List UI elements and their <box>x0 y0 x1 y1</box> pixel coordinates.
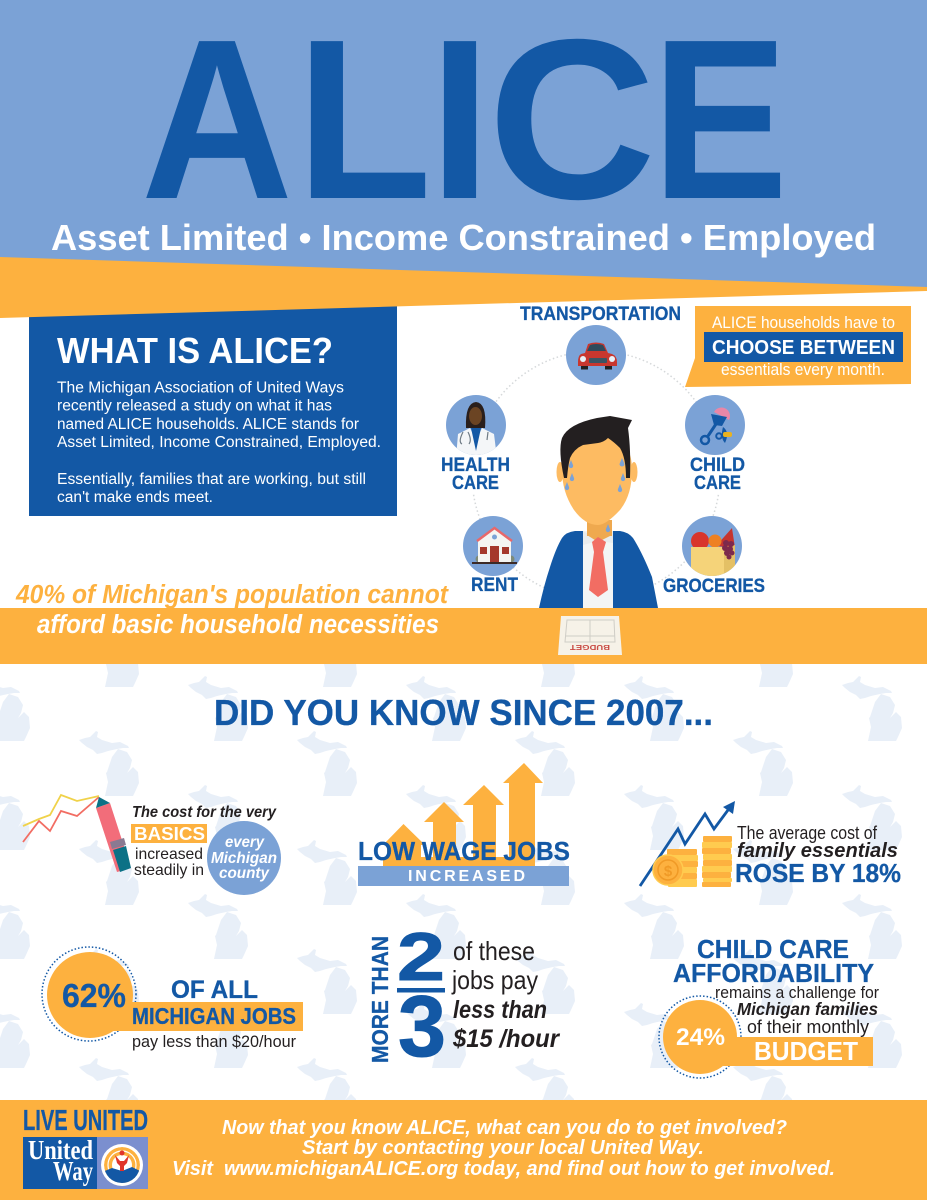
icon: budget paper <box>558 616 622 655</box>
text block: definition: named ALICE households. ALICE stands for <box>57 416 359 433</box>
callout: 40 percent statement <box>15 581 449 639</box>
panel: child care affordability: AFFORDABILITY <box>673 960 874 988</box>
logo: Live United: LIVE UNITED <box>23 1105 148 1137</box>
panel: child care affordability: remains a challenge for <box>715 984 879 1002</box>
icon: groceries bag <box>682 516 742 577</box>
title: ALICE: A <box>141 0 293 247</box>
label: health care: HEALTH <box>441 455 510 476</box>
label: child care: CHILD <box>690 455 745 476</box>
panel: family essentials: family essentials <box>737 839 898 862</box>
panel: cost of basics: Michigan <box>211 850 277 867</box>
panel: 62 percent of jobs: 62% <box>62 977 126 1014</box>
orange diagonal band <box>0 257 927 318</box>
panel: two thirds of jobs: less than <box>453 996 547 1024</box>
callout: choose between: ALICE households have to <box>712 314 895 332</box>
title: ALICE: E <box>652 0 788 247</box>
panel: child care affordability: Michigan families <box>737 999 878 1019</box>
text block: call to action: Start by contacting your local United Way. <box>302 1137 704 1159</box>
icon: pencil chart <box>23 795 131 872</box>
panel: what is ALICE <box>29 300 397 516</box>
panel: cost of basics: every <box>225 834 265 851</box>
label: transportation: TRANSPORTATION <box>520 304 681 325</box>
text block: call to action: Now that you know ALICE, what can you do to get involved? <box>222 1117 787 1139</box>
panel: cost of basics: county <box>219 865 270 882</box>
label: child care: CARE <box>694 473 741 494</box>
panel: cost of basics <box>23 795 281 895</box>
text block: definition: can't make ends meet. <box>57 489 213 506</box>
panel: child care affordability: of their monthly <box>747 1017 869 1037</box>
text block: definition: recently released a study on what it has <box>57 398 332 414</box>
text block: definition: Essentially, families that are working, but still <box>57 471 366 488</box>
panel: low wage jobs <box>358 763 570 886</box>
panel: low wage jobs: LOW WAGE JOBS <box>358 838 570 866</box>
callout: choose between: CHOOSE BETWEEN <box>712 337 895 359</box>
callout: choose between <box>685 306 911 387</box>
orange statement band <box>0 608 927 664</box>
title: ALICE: C <box>488 0 656 247</box>
heading: what is ALICE: WHAT IS ALICE? <box>57 330 333 371</box>
icon: rent house <box>463 516 523 576</box>
panel: two thirds of jobs: $15 /hour <box>452 1025 560 1053</box>
panel: two thirds of jobs: 3 <box>398 979 446 1075</box>
panel: cost of basics: The cost for the very <box>132 804 277 821</box>
panel: family essentials: The average cost of <box>737 823 878 843</box>
subtitle: Asset Limited • Income Constrained • Employed <box>51 217 876 258</box>
label: child care <box>690 455 745 494</box>
icon: rising arrows <box>383 763 543 866</box>
panel: child care affordability <box>659 936 879 1078</box>
icon: budget paper: BUDGET <box>569 643 610 650</box>
panel: 62 percent of jobs: MICHIGAN JOBS <box>132 1003 296 1029</box>
callout: 40 percent statement: 40% of Michigan's population cannot <box>15 581 449 609</box>
logo: Live United <box>23 1105 148 1189</box>
text block: call to action <box>172 1117 835 1180</box>
text block: call to action: Visit www.michiganALICE.org today, and find out how to get involved. <box>172 1158 835 1180</box>
panel: footer <box>0 1100 927 1200</box>
panel: header banner <box>0 0 927 289</box>
panel: child care affordability: 24% <box>676 1024 725 1051</box>
icon: transportation car <box>566 325 626 385</box>
icon: child care rattle <box>685 395 745 455</box>
text block: definition: Asset Limited, Income Constrained, Employed. <box>57 434 381 451</box>
panel: two thirds of jobs: MORE THAN <box>367 936 393 1063</box>
icon: coins and trend arrow: $ <box>664 863 673 880</box>
label: groceries: GROCERIES <box>663 576 765 597</box>
panel: two thirds of jobs: jobs pay <box>451 965 538 995</box>
panel: two thirds of jobs: 2 <box>397 919 445 995</box>
panel: cost of basics: increased <box>135 846 203 863</box>
label: health care <box>441 455 510 494</box>
panel: two thirds of jobs <box>367 919 560 1075</box>
panel: child care affordability: BUDGET <box>754 1038 858 1066</box>
panel: cost of basics: BASICS <box>134 823 205 844</box>
label: health care: CARE <box>452 473 499 494</box>
panel: family essentials <box>640 801 901 888</box>
illustration: worried man <box>539 416 658 608</box>
heading: did you know: DID YOU KNOW SINCE 2007... <box>214 692 713 733</box>
panel: 62 percent of jobs: pay less than $20/hour <box>132 1032 296 1051</box>
panel: family essentials: ROSE BY 18% <box>735 860 901 888</box>
panel: two thirds of jobs: of these <box>453 936 535 966</box>
title: ALICE: I <box>429 0 491 247</box>
text block: definition: The Michigan Association of United Ways <box>57 380 344 396</box>
panel: cost of basics: steadily in <box>134 862 204 879</box>
label: rent: RENT <box>471 575 518 596</box>
icon: coins and trend arrow <box>640 801 735 887</box>
logo: Live United: Way <box>53 1156 93 1186</box>
logo: Live United: United <box>28 1135 93 1165</box>
dotted ring of essentials <box>438 351 749 599</box>
panel: low wage jobs: INCREASED <box>408 868 525 885</box>
icon: health care doctor <box>446 395 506 458</box>
callout: choose between: essentials every month. <box>721 361 885 379</box>
panel: 62 percent of jobs: OF ALL <box>171 976 258 1004</box>
title: ALICE: L <box>296 0 432 247</box>
panel: child care affordability: CHILD CARE <box>697 936 849 964</box>
callout: 40 percent statement: afford basic household necessities <box>37 611 439 639</box>
panel: 62 percent of jobs <box>42 947 303 1051</box>
text block: definition <box>57 380 381 506</box>
